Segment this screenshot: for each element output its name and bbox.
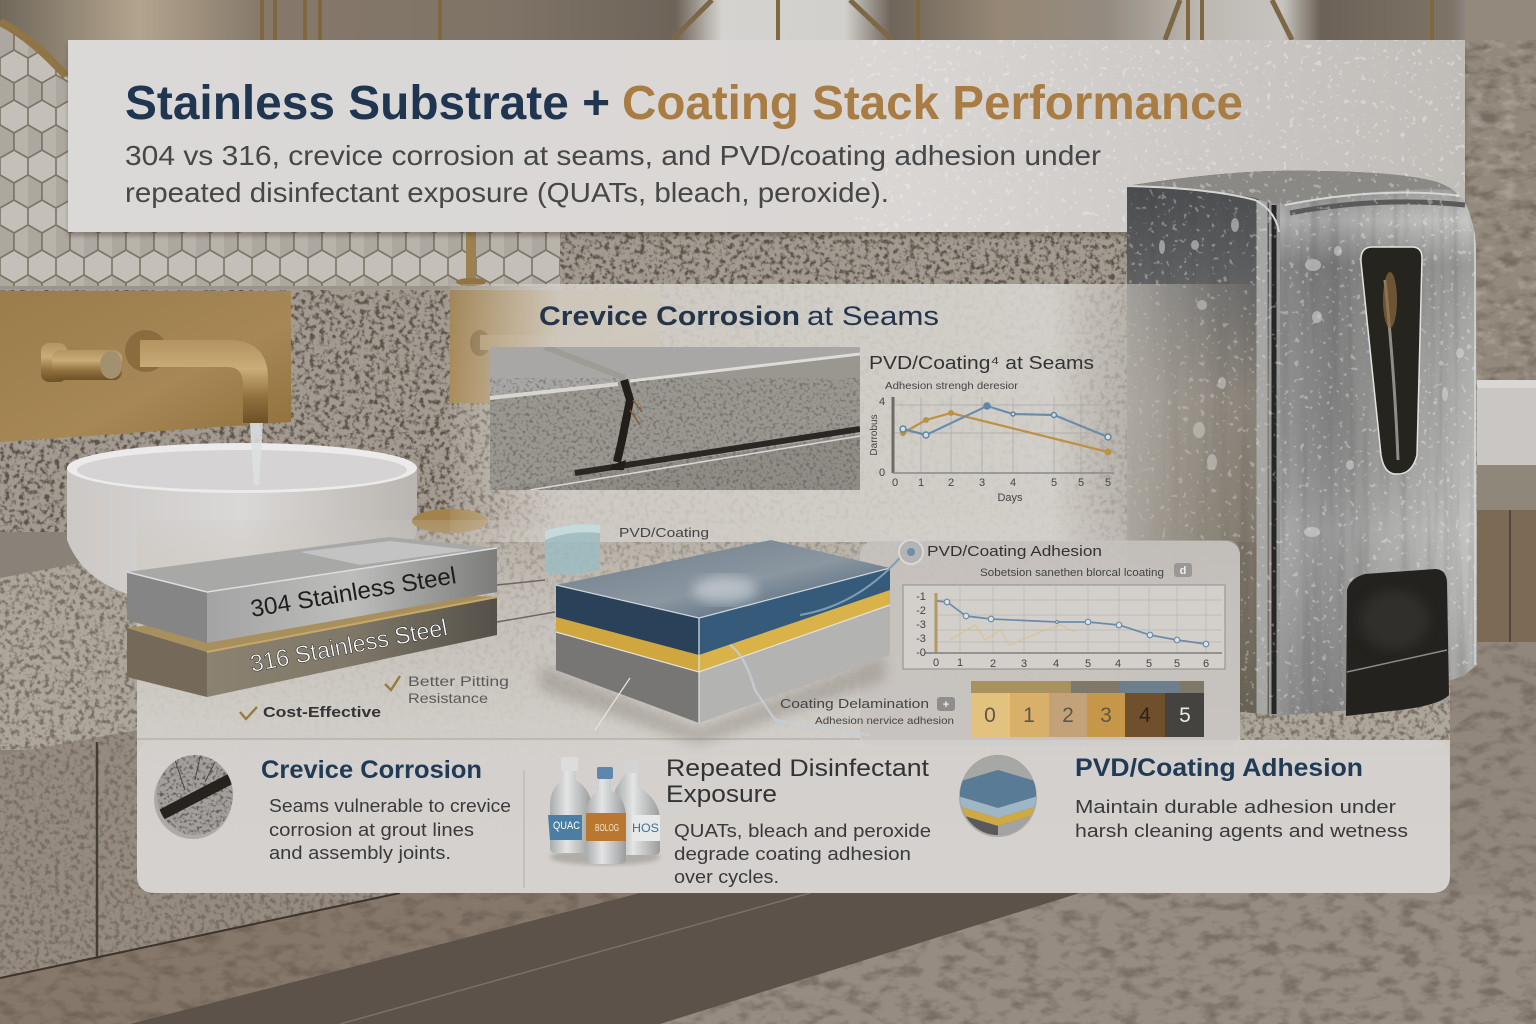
- body text: corrosion at grout lines: [269, 820, 474, 840]
- chart: PVD/coating at seams: 5: [1051, 477, 1057, 489]
- granite wall: [0, 288, 1536, 532]
- second faucet handle: [470, 330, 555, 356]
- body text: Seams vulnerable to crevice: [269, 796, 511, 816]
- bottle: HOS: HOS: [632, 821, 659, 835]
- title: [125, 77, 1243, 130]
- bar: 316 stainless steel: 316 Stainless Steel: [248, 614, 450, 678]
- title panel: [68, 40, 1465, 236]
- label: PVD/coating: PVD/Coating: [619, 525, 709, 540]
- delamination scale swatches: 1: [1023, 704, 1035, 727]
- body text: [269, 796, 511, 863]
- label: cost-effective: Cost-Effective: [263, 704, 381, 721]
- mosaic tile: [0, 22, 68, 290]
- line chart: 6: [1203, 658, 1209, 670]
- photo: corroded seam: [490, 347, 860, 490]
- delamination scale swatches: 4: [1139, 704, 1151, 727]
- chart: PVD/coating at seams: [869, 353, 1114, 504]
- coating delamination label: Coating Delamination: [780, 696, 929, 711]
- chart: PVD/coating at seams: 5: [1105, 477, 1111, 489]
- bar: 304 stainless steel: 304 Stainless Steel: [249, 562, 458, 623]
- body text: over cycles.: [674, 867, 779, 887]
- bottom row: feature columns: [154, 754, 1408, 888]
- heading: crevice corrosion at seams: Crevice Corrosion: [539, 301, 800, 331]
- chart: PVD/coating at seams: 1: [918, 477, 924, 489]
- line chart: -2: [916, 605, 926, 617]
- subtitle: [125, 140, 1101, 208]
- cabinet face: [0, 730, 640, 978]
- callout curves: [730, 645, 870, 735]
- counter top: [0, 505, 1536, 750]
- heading: crevice corrosion: Crevice Corrosion: [261, 756, 482, 784]
- delamination scale swatches: 3: [1100, 704, 1112, 727]
- stainless steel bars: [127, 537, 555, 721]
- column: crevice corrosion: [154, 755, 511, 863]
- floor: [130, 893, 1080, 1024]
- lower content panel: [137, 520, 1450, 893]
- bar: 316 stainless steel: [127, 592, 497, 697]
- body text: degrade coating adhesion: [674, 844, 911, 864]
- line chart: -1: [916, 591, 926, 603]
- brass faucet: [41, 330, 268, 485]
- line chart: 4: [1053, 658, 1059, 670]
- icon: corroded seam disc: [154, 755, 238, 839]
- chart: PVD/coating at seams: 0: [892, 477, 898, 489]
- line chart: 0: [933, 657, 939, 669]
- column: PVD/coating adhesion: [958, 754, 1408, 841]
- line chart: 2: [990, 658, 996, 670]
- coating sample cup: [545, 524, 600, 575]
- coating delamination label: +: [943, 699, 949, 711]
- lower toe-kick band: [0, 893, 640, 1024]
- chart: PVD/coating at seams: 5: [1078, 477, 1084, 489]
- body text: Maintain durable adhesion under: [1075, 797, 1396, 817]
- label: better pitting resistance: [385, 673, 509, 706]
- line chart: 3: [1021, 658, 1027, 670]
- heading: repeated disinfectant exposure: Exposure: [666, 781, 777, 808]
- water droplets: [1159, 218, 1464, 537]
- subtitle: Sobetsion sanethen blorcal lcoating: [980, 567, 1164, 579]
- shadow: [540, 655, 885, 745]
- chart: PVD/coating at seams: 0: [879, 467, 885, 479]
- column: repeated disinfectant exposure: [548, 755, 931, 887]
- chart title: PVD/Coating⁴ at Seams: [869, 353, 1094, 373]
- coating stack block: [540, 524, 905, 745]
- chart: PVD/coating at seams: Darrobus: [869, 414, 880, 456]
- subtitle: repeated disinfectant exposure (QUATs, bleach, peroxide).: [125, 177, 889, 208]
- line chart: 5: [1146, 658, 1152, 670]
- line chart: -3: [916, 633, 926, 645]
- delamination scale swatches: [971, 681, 1204, 737]
- delamination scale swatches: 2: [1062, 704, 1074, 727]
- chart: PVD/coating at seams: 4: [879, 396, 885, 408]
- sink basin: [67, 443, 417, 605]
- substrate layer: [556, 632, 699, 723]
- title: Stainless Substrate +: [125, 77, 610, 130]
- icon: layered coating disc: [958, 755, 1038, 837]
- body text: [1075, 797, 1408, 841]
- chart: PVD/coating at seams: Adhesion strengh deresior: [885, 381, 1019, 392]
- subtitle: 304 vs 316, crevice corrosion at seams, and PVD/coating adhesion under: [125, 140, 1101, 171]
- dispenser push button: [1346, 569, 1449, 716]
- icon: target badge: [899, 540, 923, 564]
- gold layer: [556, 617, 699, 672]
- badge d: [1174, 563, 1192, 577]
- coating delamination label: [780, 696, 955, 727]
- heading: repeated disinfectant exposure: [666, 755, 929, 808]
- bottle: bleach: BOLOG: [595, 823, 619, 834]
- delamination scale swatches: 5: [1179, 704, 1191, 727]
- label: better pitting resistance: Better Pitting: [408, 673, 509, 689]
- brass drain disc: [412, 509, 488, 533]
- upper wall and mirror band: [0, 0, 1536, 60]
- dispenser body: [1127, 165, 1480, 725]
- heading: PVD/coating adhesion: PVD/Coating Adhesion: [927, 543, 1102, 560]
- coating delamination label: Adhesion nervice adhesion: [815, 716, 954, 727]
- line chart: 5: [1174, 658, 1180, 670]
- bar: 304 stainless steel: [127, 537, 497, 643]
- label: better pitting resistance: Resistance: [408, 690, 488, 706]
- heading: crevice corrosion at seams: at Seams: [807, 301, 939, 331]
- panel: PVD/coating adhesion chart: [780, 540, 1225, 737]
- chart: PVD/coating at seams: Days: [997, 492, 1023, 504]
- icon: disinfectant bottles: [548, 757, 660, 865]
- chart: PVD/coating at seams: 4: [1010, 477, 1016, 489]
- line chart: 1: [957, 657, 963, 669]
- body text: and assembly joints.: [269, 843, 451, 863]
- body text: harsh cleaning agents and wetness: [1075, 821, 1408, 841]
- line chart: -3: [916, 619, 926, 631]
- line chart: 4: [1115, 658, 1121, 670]
- chart: PVD/coating at seams: 2: [948, 477, 954, 489]
- badge d: d: [1180, 565, 1186, 577]
- blue coating layer: [556, 585, 699, 655]
- heading: PVD/coating adhesion: PVD/Coating Adhesion: [1075, 754, 1363, 782]
- body text: QUATs, bleach and peroxide: [674, 821, 931, 841]
- mirror frame arc: [0, 22, 66, 76]
- bottle: QUAT: QUAC: [553, 820, 580, 832]
- dispenser window: [1361, 247, 1422, 474]
- brass wall plates: [0, 291, 291, 442]
- body text: [674, 821, 931, 887]
- line chart: 5: [1085, 658, 1091, 670]
- right side wall, sink and cabinet: [1450, 0, 1536, 895]
- chart: PVD/coating at seams: 3: [979, 477, 985, 489]
- title: Coating Stack Performance: [622, 77, 1243, 130]
- soap dispenser: [1127, 165, 1480, 725]
- delamination scale swatches: 0: [984, 704, 996, 727]
- line chart: [903, 585, 1225, 670]
- line chart: -0: [916, 647, 926, 659]
- panel: crevice corrosion at seams: [450, 284, 1262, 542]
- heading: repeated disinfectant exposure: Repeated Disinfectant: [666, 755, 929, 782]
